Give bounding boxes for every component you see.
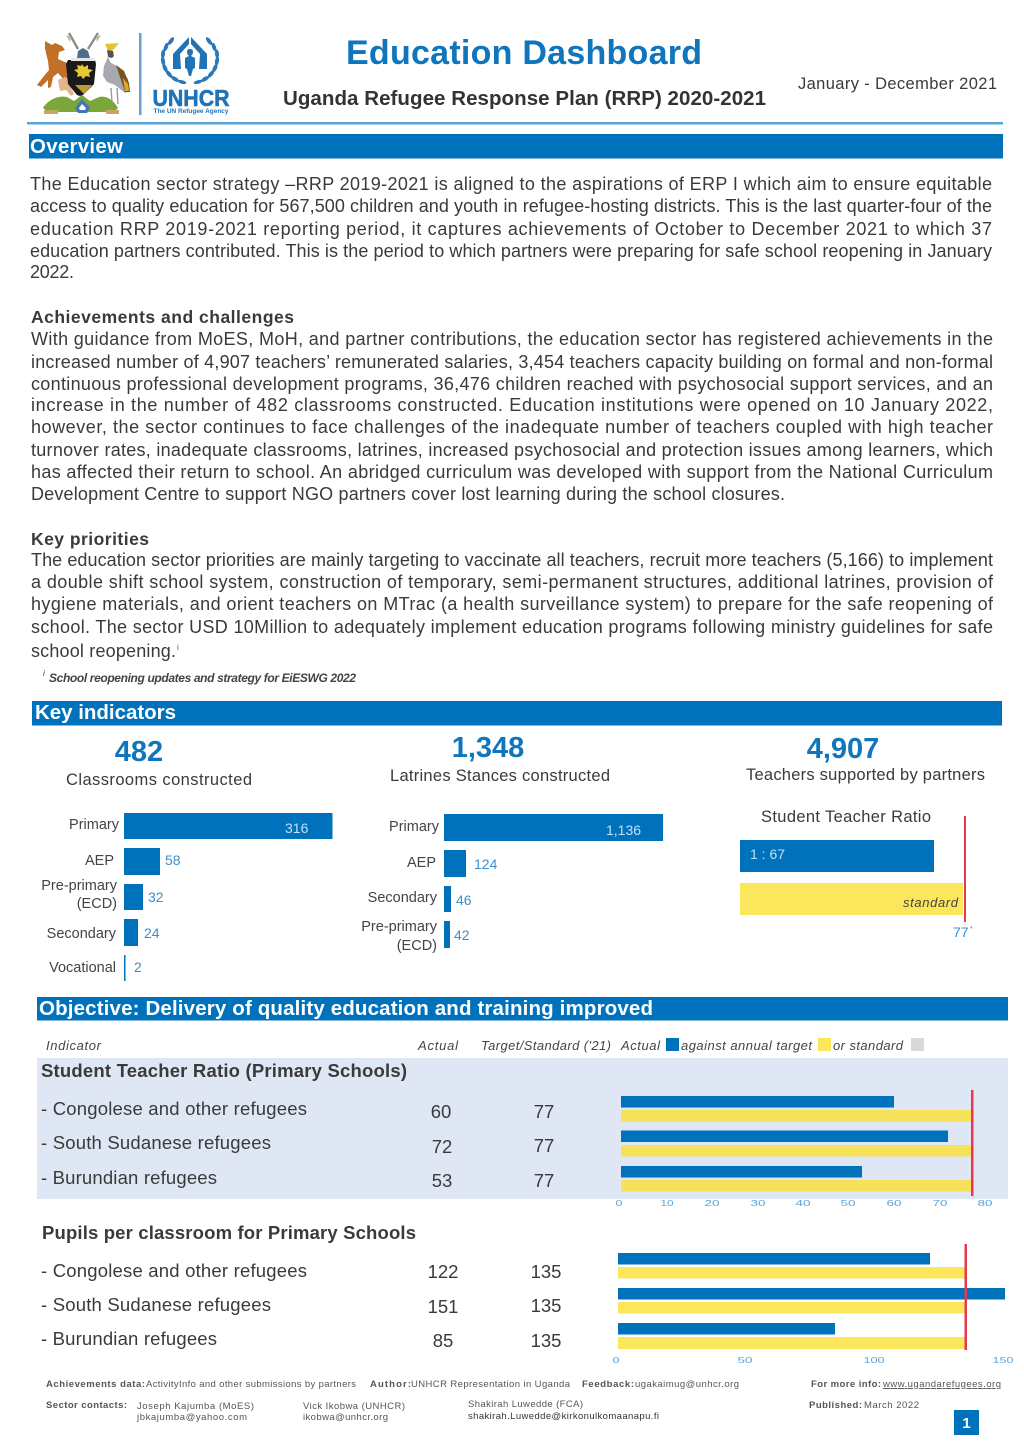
bar chart: latrines by level [361,814,663,954]
bar chart: student teacher ratio by group: 10 [660,1199,674,1208]
bar chart: student teacher ratio: Student Teacher Ratio [761,808,931,826]
footer: published date: Published: [809,1400,862,1411]
heading: key indicators [32,701,1002,726]
text block: overview: The Education sector strategy –RRP 2019-2021 is aligned to the aspirations of ERP I which aim to ensure equitable [30,174,992,194]
indicator: teachers supported: 4,907 [807,733,879,765]
table: student teacher ratio: 72 [432,1136,452,1157]
bar chart: student teacher ratio [740,808,973,940]
text block: key priorities: i [177,643,179,652]
bar chart: classrooms by level: Primary [69,817,120,833]
bar chart: student teacher ratio: 77 [953,924,969,940]
bar chart: latrines by level: 1,136 [606,822,641,838]
bar chart: student teacher ratio by group: 0 [616,1199,623,1208]
bar chart: latrines by level: Primary [389,819,440,835]
text block: key priorities: school reopening. [31,641,176,661]
bar chart: latrines by level: 46 [456,892,472,908]
footer: sector contacts: ikobwa@unhcr.org [303,1412,388,1423]
bar chart: classrooms by level: (ECD) [77,896,117,912]
table header and legend: Target/Standard ('21) [481,1038,611,1053]
bar chart: classrooms by level: Vocational [49,960,116,976]
panel background: student teacher ratio [37,1058,1008,1199]
indicator: teachers supported [746,733,985,784]
bar chart: student teacher ratio by group [616,1090,993,1208]
logo: UNHCR: UNHCR [152,85,230,111]
heading: key indicators: Key indicators [35,701,176,724]
table header and legend: Actual [417,1038,459,1053]
bar chart: classrooms by level: Secondary [47,926,117,942]
bar chart: student teacher ratio by group: 30 [750,1199,766,1208]
footer: sector contacts [46,1399,659,1423]
footer: sector contacts: Vick Ikobwa (UNHCR) [303,1401,405,1412]
bar chart: classrooms by level: AEP [85,853,114,869]
table: pupils per classroom: 135 [531,1261,561,1282]
panel: key indicators [32,701,1002,981]
text block: achievements and challenges [31,329,993,504]
bar chart: student teacher ratio by group: 20 [704,1199,720,1208]
heading: key priorities: Key priorities [31,529,149,549]
table header and legend: or standard [833,1038,904,1053]
text block: key priorities: school. The sector USD 10Million to adequately implement education programs following ministry guidelines for safe [31,617,993,637]
bar chart: student teacher ratio: 1 : 67 [750,846,785,862]
date range: January - December 2021 [798,75,997,93]
table header and legend: Indicator [46,1038,102,1053]
indicator: latrine stances constructed: 1,348 [452,732,524,764]
bar chart: pupils per classroom by group: 50 [738,1356,753,1365]
table: pupils per classroom: Pupils per classroom for Primary Schools [42,1222,416,1243]
footer: credits: Achievements data: [46,1379,145,1390]
footer: more info: For more info: [811,1379,881,1390]
bar chart: classrooms by level: 316 [285,820,309,836]
text block: overview: access to quality education for 567,500 children and youth in refugee-hosting districts. This is the last quarter-four of the [30,196,992,216]
table: student teacher ratio: 53 [432,1170,452,1191]
bar chart: student teacher ratio: * [970,926,973,933]
table: pupils per classroom: 122 [428,1261,458,1282]
bar chart: classrooms by level: 24 [144,925,160,941]
table: student teacher ratio: 77 [534,1170,554,1191]
table: student teacher ratio: Student Teacher Ratio (Primary Schools) [41,1060,407,1081]
footnote: School reopening updates and strategy for EiESWG 2022 [49,671,356,685]
text block: overview: education partners contributed. This is the period to which partners were preparing for safe school reopening in January [30,241,992,261]
logo: Uganda coat of arms [37,33,130,114]
text block: key priorities: hygiene materials, and orient teachers on MTrac (a health surveillance system) to prepare for the safe reopening of [31,594,994,614]
bar chart: classrooms by level: 58 [165,852,181,868]
bar chart: classrooms by level: Pre-primary [41,878,118,894]
header rule [27,122,1003,124]
text block: achievements and challenges: Development Centre to support NGO partners cover lost learning during the school closures. [31,484,785,504]
bar chart: classrooms by level [41,813,332,981]
footer: more info: www.ugandarefugees.org [882,1379,1001,1390]
title: Education Dashboard [346,34,702,72]
table: student teacher ratio: 60 [431,1101,451,1122]
logo: UNHCR: The UN Refugee Agency [154,108,229,115]
footer: sector contacts: Shakirah Luwedde (FCA) [468,1399,583,1410]
table: student teacher ratio: 77 [534,1135,554,1156]
bar chart: pupils per classroom by group: 150 [992,1356,1014,1365]
bar chart: student teacher ratio: standard [903,895,959,910]
bar chart: latrines by level: Pre-primary [361,919,438,935]
footer: sector contacts: shakirah.Luwedde@kirkonulkomaanapu.fi [468,1411,659,1422]
bar chart: classrooms by level: 2 [134,959,142,975]
bar chart: latrines by level: Secondary [368,890,438,906]
table: student teacher ratio: - Congolese and other refugees [41,1098,307,1119]
indicator: latrine stances constructed [390,732,610,785]
indicator: classrooms constructed: Classrooms constructed [66,771,252,789]
page number: 1 [962,1415,971,1432]
text block: overview: education RRP 2019-2021 reporting period, it captures achievements of October to December 2021 to which 37 [30,219,992,239]
footer: credits: Feedback: [582,1379,634,1390]
footer: sector contacts: Sector contacts: [46,1400,127,1411]
text block: key priorities: a double shift school system, construction of temporary, semi-permanent structures, additional latrines, provision of [31,572,994,592]
indicator: classrooms constructed: 482 [115,736,163,768]
bar chart: latrines by level: 42 [454,927,470,943]
footnote: i [43,669,45,678]
indicator: teachers supported: Teachers supported by partners [746,766,985,784]
text block: key priorities [31,550,994,661]
table: pupils per classroom: - Burundian refugees [41,1328,217,1349]
footer: sector contacts: Joseph Kajumba (MoES) [137,1401,254,1412]
header [37,33,997,115]
text block: achievements and challenges: turnover rates, inadequate classrooms, latrines, increased psychosocial and protection issues among learners, which [31,440,993,460]
heading: overview [29,134,1003,158]
table header and legend: Actual [620,1038,661,1053]
table: pupils per classroom: 135 [531,1295,561,1316]
text block: achievements and challenges: continuous professional development programs, 36,476 children reached with psychosocial support services, and an [31,374,993,394]
bar chart: student teacher ratio by group: 70 [932,1199,948,1208]
footer: credits: ActivityInfo and other submissions by partners [146,1379,356,1390]
table: student teacher ratio: 77 [534,1101,554,1122]
panel: overview [29,134,1003,685]
table: pupils per classroom: 85 [433,1330,453,1351]
text block: achievements and challenges: With guidance from MoES, MoH, and partner contributions, the education sector has registered achievements in the [31,329,993,349]
text block: achievements and challenges: increase in the number of 482 classrooms constructed. Education institutions were opened on 10 January 2022, [31,395,993,415]
subtitle: Uganda Refugee Response Plan (RRP) 2020-2021 [283,87,766,110]
footer: credits: ugakaimug@unhcr.org [635,1379,739,1390]
bar chart: classrooms by level: 32 [148,889,164,905]
table: pupils per classroom: - South Sudanese refugees [41,1294,271,1315]
bar chart: pupils per classroom by group: 0 [612,1356,620,1365]
table: student teacher ratio: - Burundian refugees [41,1167,217,1188]
bar chart: student teacher ratio by group: 80 [978,1199,993,1208]
footer: credits: Author: [370,1379,411,1390]
footer: credits [46,1379,739,1390]
bar chart: latrines by level: (ECD) [397,938,437,954]
text block: achievements and challenges: has affected their return to school. An abridged curriculum was developed with support from the National Curriculum [31,462,993,482]
table header and legend [46,1038,924,1053]
text block: overview: 2022. [30,262,74,282]
panel: objective [37,997,1014,1365]
bar chart: student teacher ratio by group: 50 [840,1199,856,1208]
footer: credits: UNHCR Representation in Uganda [411,1379,571,1390]
table: pupils per classroom: 151 [428,1296,458,1317]
logo: UNHCR [152,36,230,115]
indicator: latrine stances constructed: Latrines Stances constructed [390,767,610,785]
footer: published date: March 2022 [864,1400,919,1411]
footer [46,1379,1001,1435]
text block: achievements and challenges: however, the sector continues to face challenges of the inadequate number of teachers coupled with high teacher [31,417,993,437]
table header and legend: against annual target [681,1038,813,1053]
table: pupils per classroom [41,1222,561,1351]
table: pupils per classroom: 135 [531,1330,561,1351]
indicator: classrooms constructed [66,736,252,789]
heading: overview: Overview [30,135,123,158]
table: student teacher ratio: - South Sudanese refugees [41,1132,271,1153]
footer: published date [809,1400,919,1411]
heading: achievements and challenges: Achievements and challenges [31,307,294,327]
table: pupils per classroom: - Congolese and other refugees [41,1260,307,1281]
bar chart: pupils per classroom by group [612,1244,1014,1365]
divider [139,33,142,115]
heading: objective: Objective: Delivery of quality education and training improved [39,997,653,1020]
text block: overview [30,174,992,282]
bar chart: student teacher ratio by group: 60 [886,1199,902,1208]
bar chart: latrines by level: AEP [407,855,436,871]
bar chart: student teacher ratio by group: 40 [796,1199,811,1208]
heading: objective [37,997,1008,1020]
footer: more info [811,1379,1001,1390]
text block: achievements and challenges: increased number of 4,907 teachers’ remunerated salaries, 3,454 teachers capacity building on formal and non-formal [31,352,993,372]
page number [954,1410,979,1435]
footer: sector contacts: jbkajumba@yahoo.com [136,1412,247,1423]
bar chart: pupils per classroom by group: 100 [864,1356,885,1365]
bar chart: latrines by level: 124 [474,856,498,872]
text block: key priorities: The education sector priorities are mainly targeting to vaccinate all teachers, recruit more teachers (5,166) to implement [31,550,993,570]
table: student teacher ratio [41,1060,554,1191]
